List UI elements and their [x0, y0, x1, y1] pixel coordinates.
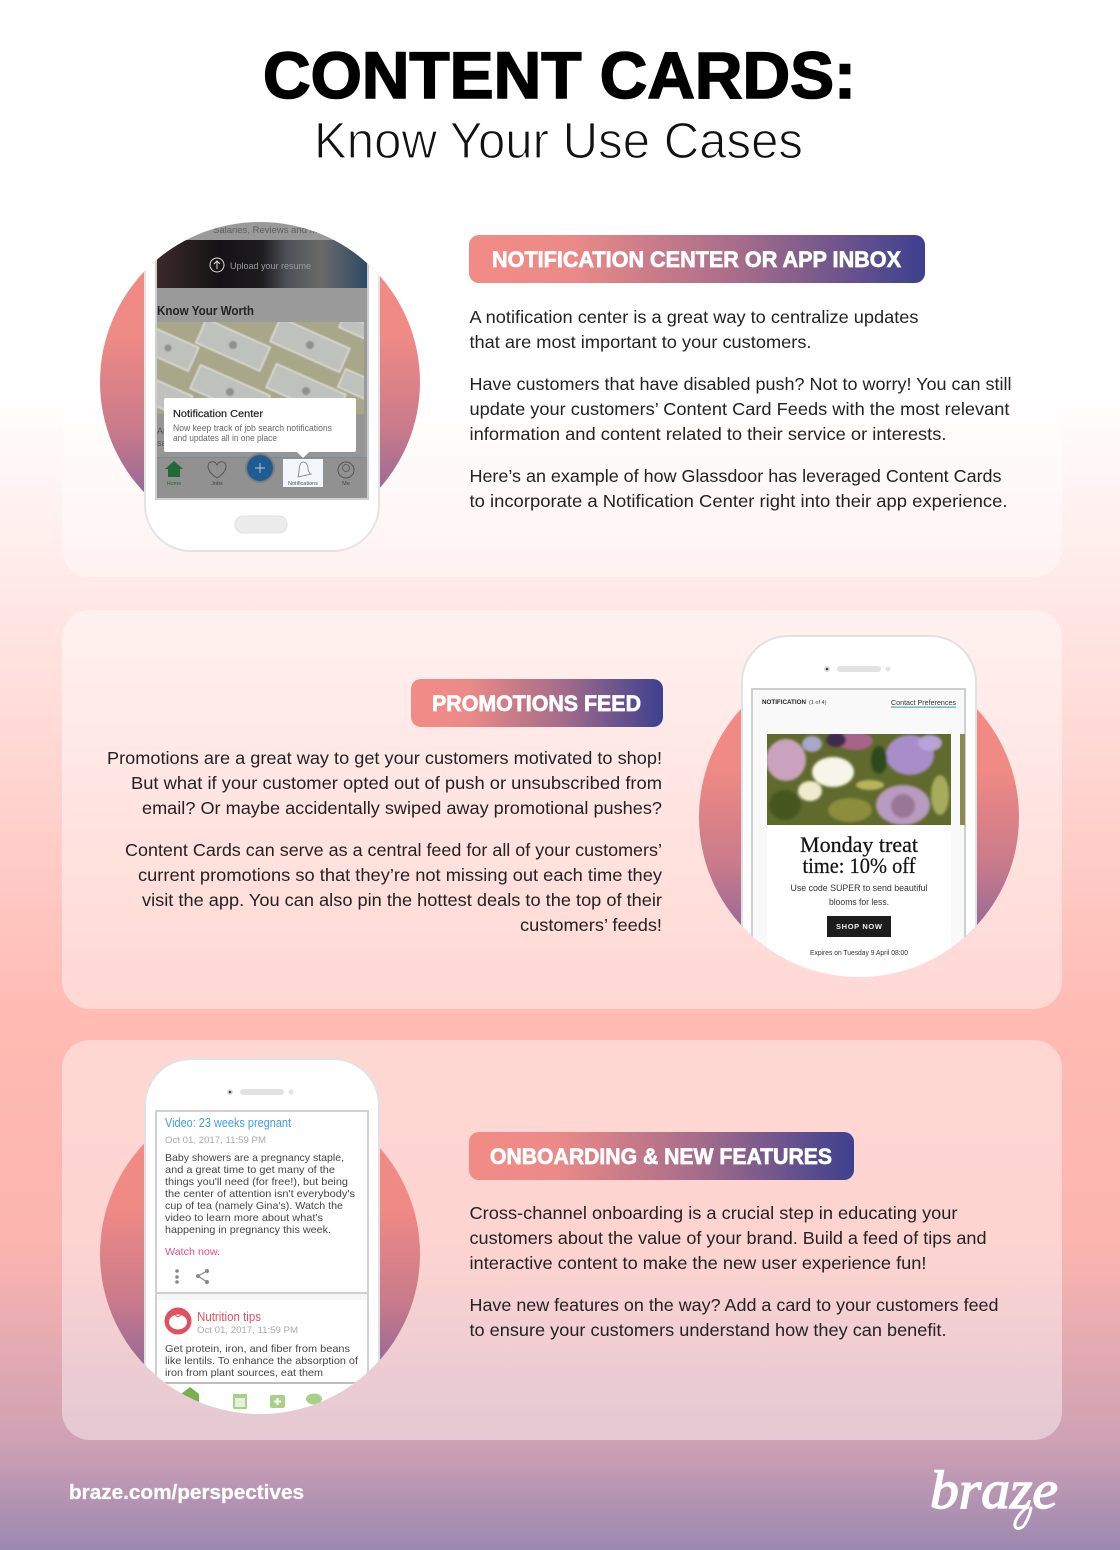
popup: notification center: Notification Center [173, 408, 264, 420]
phone mockup: Glassdoor notification center: Home [167, 481, 181, 487]
phone mockup: pregnancy content feed: Nutrition tips [197, 1309, 261, 1324]
phone mockup: Glassdoor notification center: Salaries, Reviews and more [213, 225, 331, 236]
phone mockup: Glassdoor notification center: Ar [157, 426, 166, 436]
phone mockup: pregnancy content feed: and a great time to get many of the [165, 1164, 335, 1176]
title [263, 38, 856, 169]
offer card [768, 836, 950, 977]
phone mockup: pregnancy content feed: cup of tea (namely Gina's). Watch the [165, 1200, 343, 1212]
heading pill: promotions feed: PROMOTIONS FEED [432, 691, 641, 716]
phone mockup: pregnancy content feed: Watch now. [165, 1246, 220, 1258]
text block: notification center [470, 307, 1012, 511]
text block: onboarding: to ensure your customers understand how they can benefit. [470, 1320, 946, 1340]
text block: onboarding: Have new features on the way? Add a card to your customers feed [470, 1295, 998, 1315]
circle backdrop [699, 657, 1019, 977]
logo: braze: braze [930, 1460, 1058, 1520]
popup: notification center: Now keep track of job search notifications [173, 423, 333, 433]
offer card: Monday treat [800, 832, 918, 857]
heading pill: onboarding: ONBOARDING & NEW FEATURES [490, 1144, 832, 1169]
phone mockup: Glassdoor notification center [144, 222, 380, 552]
panel: promotions feed [62, 610, 1062, 1009]
text block: promotions feed: visit the app. You can also pin the hottest deals to the top of their [142, 890, 662, 910]
phone mockup: Glassdoor notification center: Jobs [211, 481, 223, 487]
text block: promotions feed: Content Cards can serve as a central feed for all of your customers’ [125, 840, 662, 860]
phone mockup: pregnancy content feed: the center of attention isn't everybody's [165, 1188, 355, 1200]
phone mockup: pregnancy content feed: like lentils. To enhance the absorption of [165, 1355, 358, 1367]
phone mockup: Glassdoor notification center: Upload your resume [230, 261, 311, 271]
text block: promotions feed: Promotions are a great way to get your customers motivated to shop! [107, 748, 662, 768]
text block: promotions feed: But what if your customer opted out of push or unsubscribed from [131, 773, 662, 793]
flower image [766, 732, 951, 825]
heading pill: notification center [469, 235, 925, 283]
phone mockup: pregnancy content feed: Oct 01, 2017, 11:59 PM [197, 1325, 298, 1336]
phone mockup: pregnancy content feed: video to learn more about what's [165, 1212, 323, 1224]
text block: notification center: Have customers that have disabled push? Not to worry! You can still [470, 374, 1012, 394]
phone mockup: Glassdoor notification center: Notifications [288, 481, 318, 487]
text block: onboarding: Cross-channel onboarding is a crucial step in educating your [470, 1203, 958, 1223]
footer url: braze.com/perspectives [69, 1481, 304, 1504]
phone mockup: pregnancy content feed [144, 1058, 380, 1414]
text block: onboarding [470, 1203, 998, 1340]
offer card: time: 10% off [802, 853, 916, 878]
phone mockup: pregnancy content feed: Oct 01, 2017, 11:59 PM [165, 1135, 266, 1146]
text block: notification center: Here’s an example of how Glassdoor has leveraged Content Cards [470, 466, 1002, 486]
phone mockup: Glassdoor notification center: Know Your Worth [157, 304, 254, 318]
text block: notification center: update your customers’ Content Card Feeds with the most relevant [470, 399, 1010, 419]
bottom nav icons [181, 1387, 322, 1409]
text block: promotions feed: email? Or maybe accidentally swiped away promotional pushes? [142, 798, 662, 818]
offer card: Use code SUPER to send beautiful [790, 883, 928, 893]
heading pill: onboarding [469, 1132, 854, 1180]
text block: notification center: information and content related to their service or interests. [470, 424, 946, 444]
text block: notification center: A notification center is a great way to centralize updates [470, 307, 919, 327]
panel: notification center [64, 222, 1060, 577]
nav bar [157, 457, 367, 498]
text block: onboarding: interactive content to make the new user experience fun! [470, 1253, 926, 1273]
phone mockup: flower promotion: (1 of 4) [809, 700, 827, 706]
title: CONTENT CARDS: [263, 38, 856, 112]
phone mockup: flower promotion [741, 635, 977, 977]
phone mockup: pregnancy content feed: iron from plant sources, eat them [165, 1367, 323, 1379]
phone mockup: flower promotion: Contact Preferences [891, 698, 956, 707]
circle backdrop [100, 222, 420, 542]
heading pill: promotions feed [411, 679, 663, 727]
phone mockup: pregnancy content feed: Video: 23 weeks pregnant [165, 1115, 291, 1130]
phone mockup: pregnancy content feed: happening in pregnancy this week. [165, 1224, 331, 1236]
money image [157, 322, 364, 414]
phone mockup: flower promotion: NOTIFICATION [762, 700, 806, 706]
phone mockup: pregnancy content feed: Baby showers are a pregnancy staple, [165, 1152, 344, 1164]
text block: notification center: to incorporate a Notification Center right into their app experience. [470, 491, 1008, 511]
text block: promotions feed [107, 748, 662, 935]
phone mockup: Glassdoor notification center: Me [342, 481, 350, 487]
text block: promotions feed: customers’ feeds! [520, 915, 662, 935]
circle backdrop [100, 1094, 420, 1414]
offer card: SHOP NOW [836, 922, 883, 931]
heading pill: notification center: NOTIFICATION CENTER OR APP INBOX [492, 247, 901, 272]
offer card: Expires on Tuesday 9 April 08:00 [810, 948, 908, 957]
panel: onboarding and new features [62, 1040, 1062, 1479]
text block: notification center: that are most important to your customers. [470, 332, 812, 352]
text block: onboarding: customers about the value of your brand. Build a feed of tips and [470, 1228, 986, 1248]
phone mockup: pregnancy content feed: things you'll need (for free!), but being [165, 1176, 348, 1188]
subtitle: Know Your Use Cases [314, 112, 803, 169]
photo banner [157, 240, 367, 288]
phone mockup: Glassdoor notification center: sa [157, 438, 167, 448]
popup: notification center [164, 398, 356, 458]
phone mockup: pregnancy content feed: Get protein, iron, and fiber from beans [165, 1343, 350, 1355]
popup: notification center: and updates all in one place [173, 433, 277, 443]
icon: tomato [164, 1308, 192, 1334]
text block: promotions feed: current promotions so that they’re not missing out each time they [138, 865, 662, 885]
offer card: blooms for less. [829, 897, 889, 907]
action icons [175, 1269, 209, 1284]
